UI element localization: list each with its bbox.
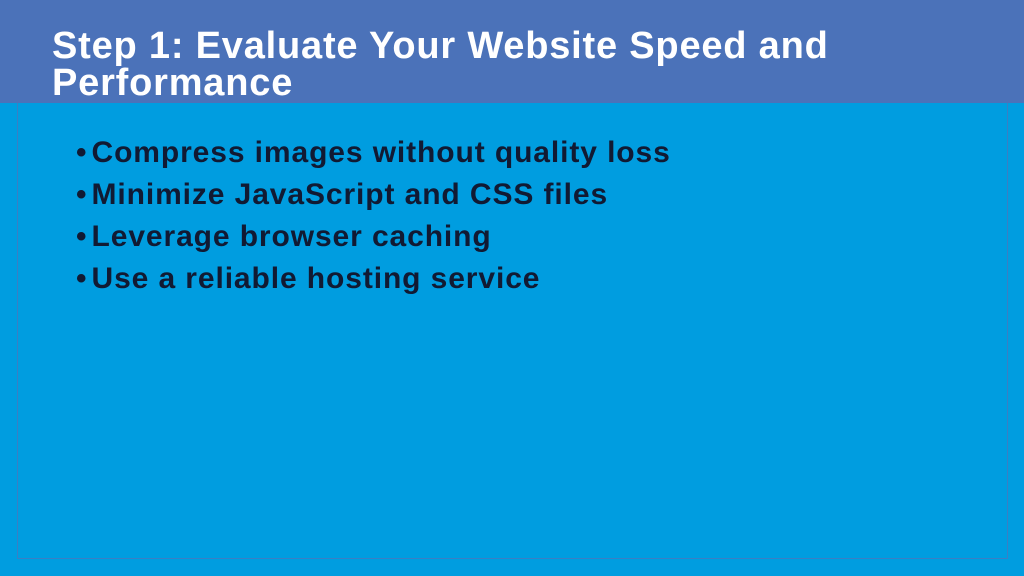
bullet 1: Compress images without quality loss [92, 136, 671, 169]
content frame [17, 103, 1008, 559]
title [52, 25, 829, 104]
bullet 3: Leverage browser caching [92, 220, 492, 253]
bullet list [77, 136, 671, 295]
bullet 4: Use a reliable hosting service [92, 262, 540, 295]
bullet 2: Minimize JavaScript and CSS files [92, 178, 608, 211]
title: Step 1: Evaluate Your Website Speed and [52, 25, 829, 67]
title: Performance [52, 62, 293, 104]
header band [0, 0, 1024, 103]
